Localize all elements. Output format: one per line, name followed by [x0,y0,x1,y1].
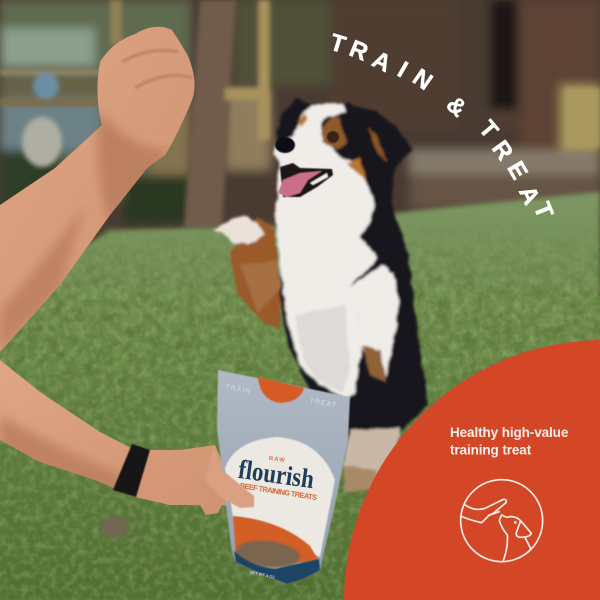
shaded belly fur [295,305,350,393]
headline: TRAIN & TREAT: T [327,29,349,59]
tongue [278,171,322,197]
product descriptor: BEEF TRAINING TREATS [239,481,318,502]
icon: hand pointing at dog [461,480,543,562]
tan brow left [298,112,307,128]
dog [213,98,428,492]
panel: orange callout circle [344,340,600,600]
net weight: NET WT 4 OZ [249,569,276,580]
dog face details [275,131,339,197]
bag top labels: TRAIN [225,384,252,395]
callout text: training treat [450,442,532,458]
person's raised arm and fist [0,26,194,352]
bag body [217,370,350,584]
headline: TRAIN & TREAT: E [501,157,533,184]
left paw: white [213,215,265,243]
headline: TRAIN & TREAT: T [528,199,558,223]
bag top label right: TREAT [309,397,338,410]
headline: TRAIN & TREAT: & [441,91,472,123]
right paw and foreleg: white [350,266,399,378]
raised left leg: brown [230,217,280,330]
lawn [0,192,600,600]
lawn underlay [0,300,600,600]
eye [327,131,339,143]
headline: TRAIN & TREAT: N [408,64,437,96]
lower fur: white and tan [344,428,400,492]
person's lower arm [0,360,227,515]
tan cheek [347,158,366,180]
tan eyebrow patch [322,115,347,150]
brand name: flourish [237,454,316,494]
kibble window [235,538,301,570]
teeth [310,173,328,185]
navy base [234,551,320,584]
watch band [113,444,150,497]
headline: TRAIN & TREAT [327,29,558,223]
orange hang tab [258,377,304,403]
headline: TRAIN & TREAT: A [513,182,545,209]
callout text: Healthy high-value [450,425,569,440]
white chest and face [274,103,377,398]
white oval label [225,437,335,557]
tan ear stripe [368,127,388,163]
headline: TRAIN & TREAT: T [473,115,504,144]
nose [275,137,295,153]
dog body: black coat [277,98,428,492]
base backdrop [0,0,600,300]
thumb over bag [205,446,254,508]
headline: TRAIN & TREAT: R [486,136,518,166]
orange band [233,516,319,565]
headline: TRAIN & TREAT: A [368,46,395,78]
raw label: RAW [268,456,286,464]
headline: TRAIN & TREAT: I [393,57,412,83]
treat bag [217,370,350,584]
tan foreleg feathering [362,345,386,382]
mouth [280,163,333,197]
headline: TRAIN & TREAT: R [346,35,372,67]
